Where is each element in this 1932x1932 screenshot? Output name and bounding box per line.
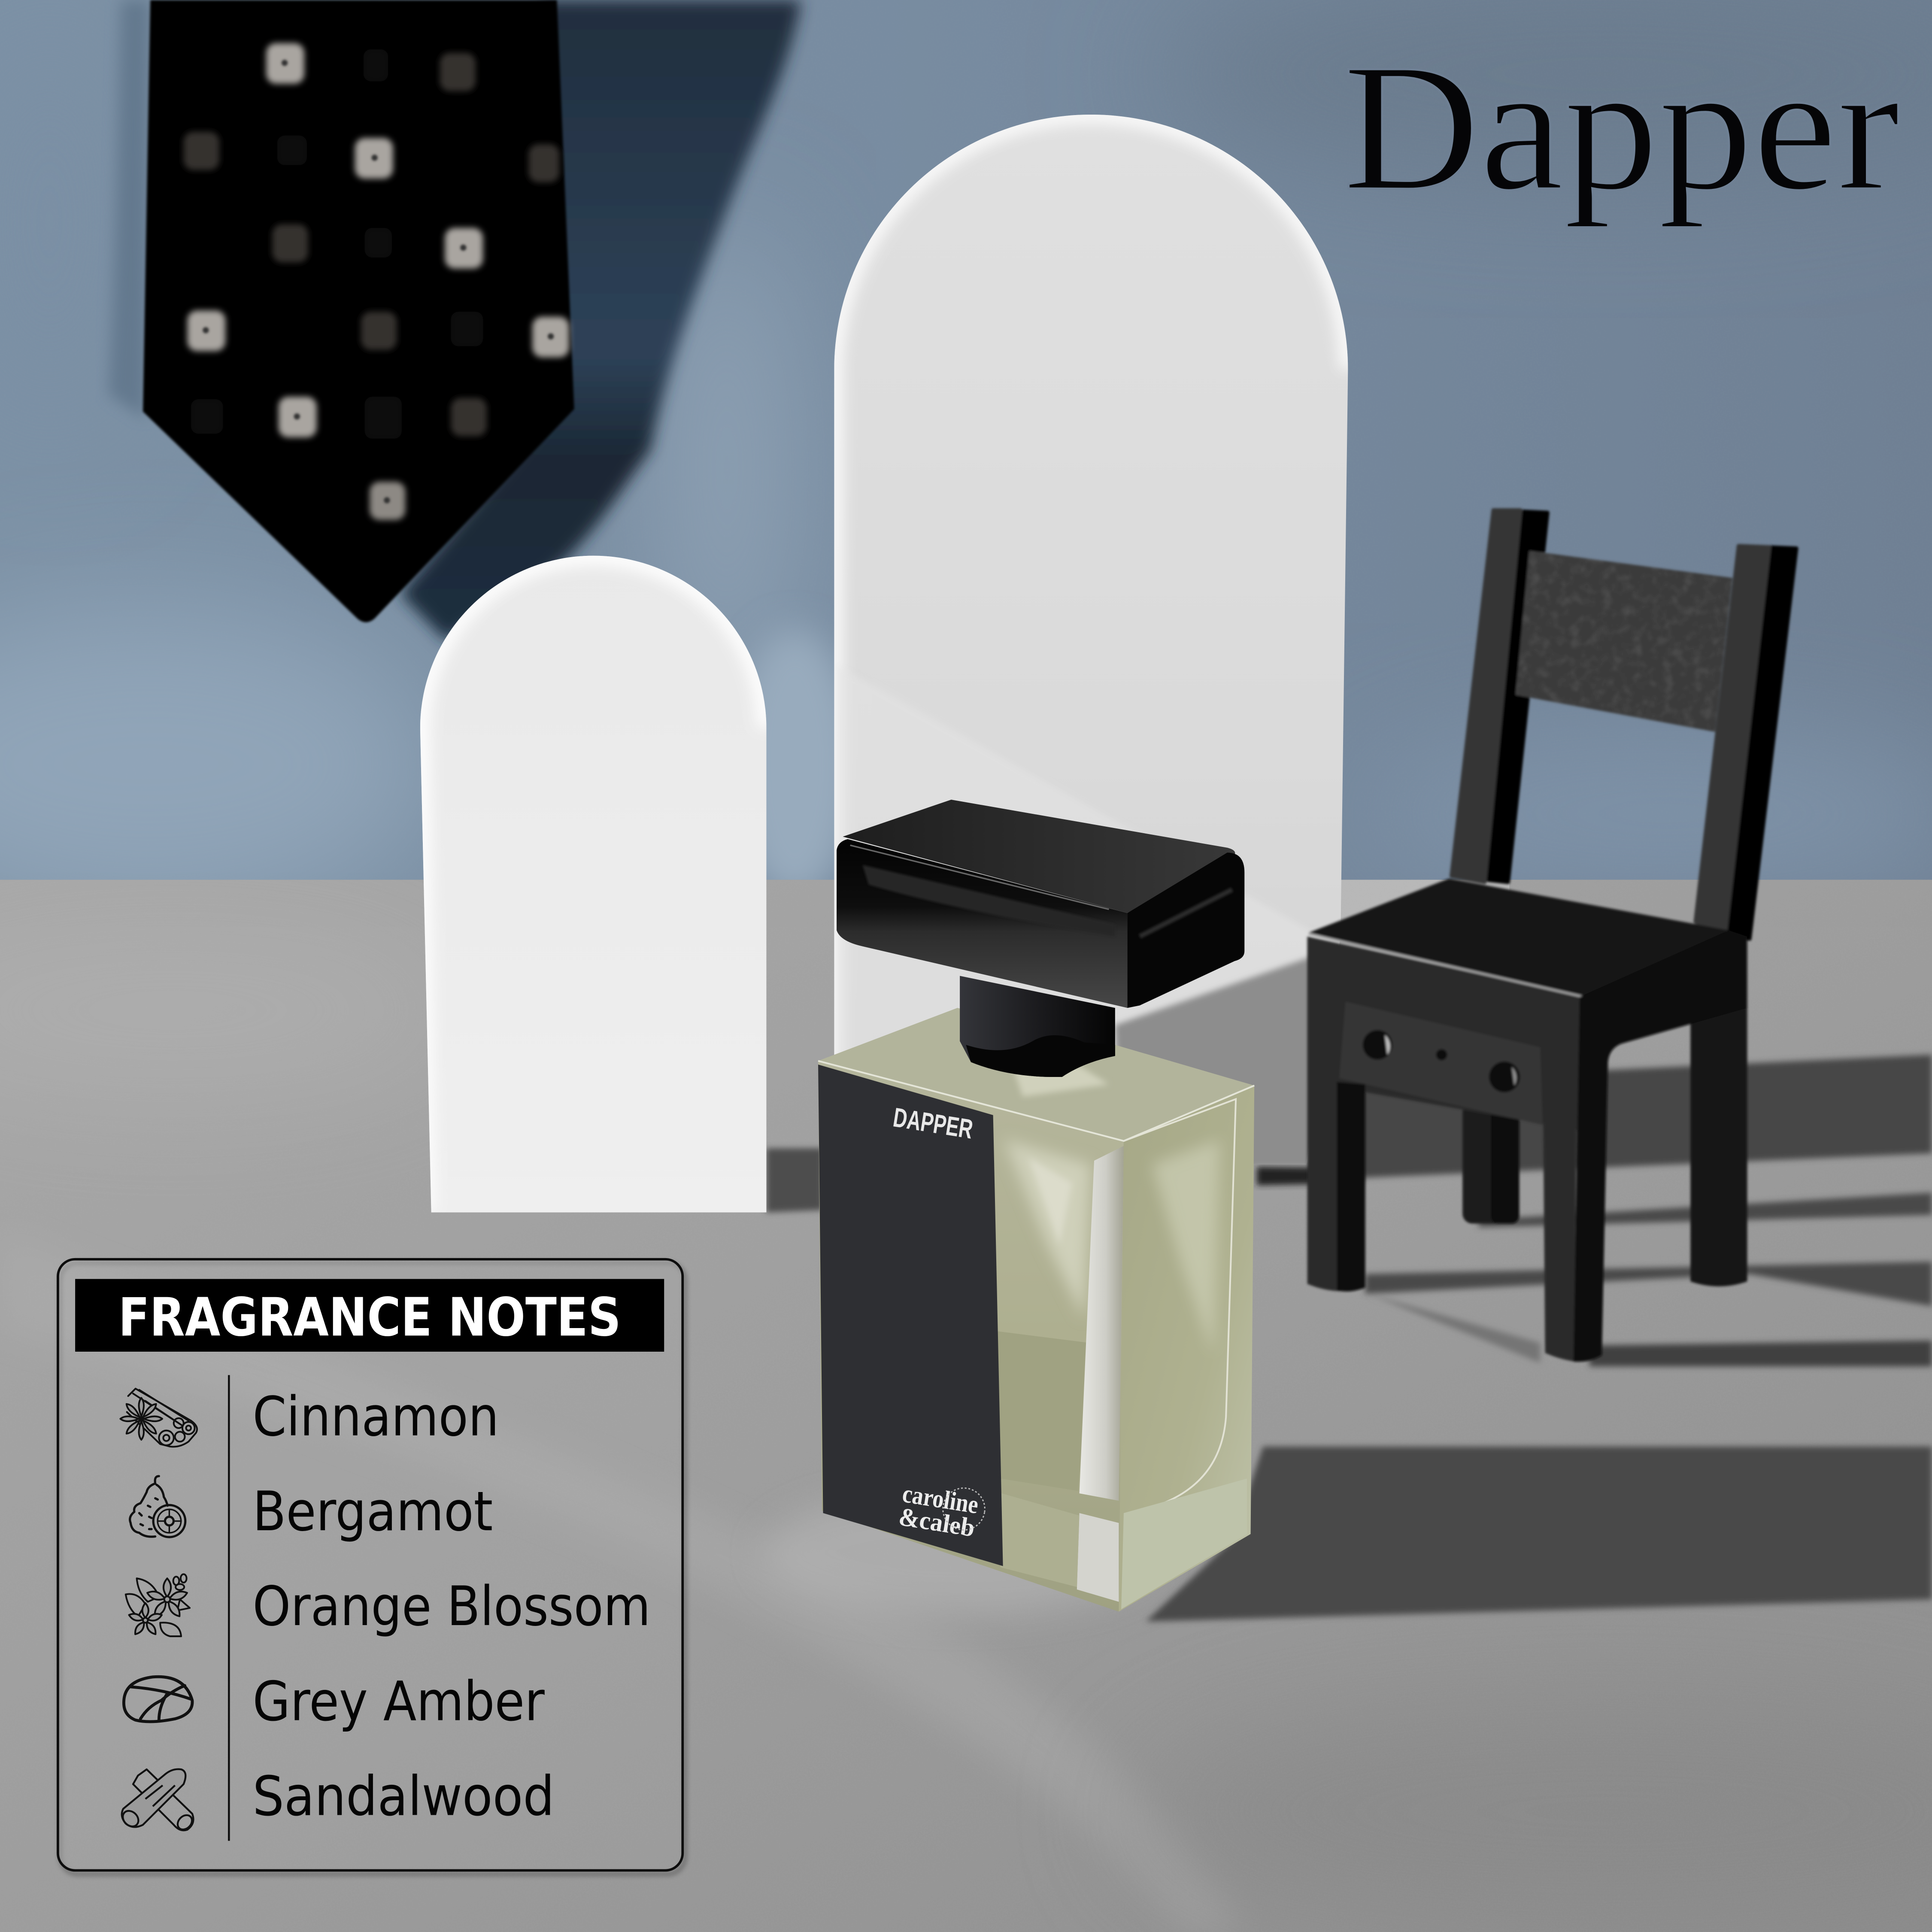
panel divider	[228, 1375, 230, 1841]
icon: cinnamon and star anise	[120, 1389, 197, 1447]
perfume bottle	[818, 800, 1254, 1612]
glass top	[818, 1008, 1254, 1141]
bottle shadow on floor	[1146, 1447, 1932, 1622]
wall background	[0, 0, 1932, 924]
cap front	[837, 839, 1128, 1008]
liquid and glass details	[818, 1053, 1254, 1609]
chair	[1307, 510, 1796, 1362]
cap right side	[1128, 852, 1244, 1008]
large arch	[825, 105, 1356, 1177]
chair seat edge highlight	[1309, 934, 1583, 997]
front legs	[1307, 937, 1577, 1362]
icon: bergamot	[130, 1476, 185, 1537]
bottle label	[818, 1065, 1003, 1566]
glass front face	[818, 1061, 1124, 1612]
note: Cinnamon: Cinnamon	[252, 1385, 499, 1448]
chair backrest	[1516, 551, 1732, 732]
chair apron	[1307, 937, 1583, 1131]
chair apron recess with holes	[1339, 1002, 1543, 1125]
title: Dapper	[1343, 26, 1900, 228]
chair side rail and dark corner	[1574, 930, 1747, 1362]
label brand name: DAPPER	[891, 1102, 975, 1145]
cap top	[843, 800, 1235, 913]
note labels	[252, 1385, 651, 1828]
panel header: FRAGRANCE NOTES	[118, 1287, 621, 1349]
label logo: &caleb	[897, 1502, 977, 1543]
icon: sandalwood	[120, 1769, 195, 1832]
small arch	[413, 548, 776, 1220]
panel: fragrance notes	[58, 1259, 682, 1870]
chair back posts	[1451, 510, 1796, 939]
label logo: caroline	[901, 1479, 980, 1520]
cap highlights	[850, 845, 1232, 937]
label logo	[897, 1478, 988, 1544]
neck	[960, 976, 1115, 1077]
note: Grey Amber: Grey Amber	[252, 1670, 545, 1733]
tie pattern squares	[184, 43, 569, 520]
floor shadow beside small arch	[766, 1148, 823, 1213]
glass right face	[1119, 1086, 1254, 1612]
chair seat	[1309, 879, 1729, 997]
icon: grey amber	[124, 1677, 192, 1722]
note: Bergamot: Bergamot	[252, 1480, 493, 1543]
necktie	[143, 0, 574, 622]
note: Sandalwood: Sandalwood	[252, 1765, 555, 1828]
floor	[0, 880, 1932, 1932]
chair shadows on floor	[1257, 1055, 1932, 1366]
icon: orange blossom	[126, 1574, 190, 1636]
back legs	[1462, 974, 1747, 1286]
note: Orange Blossom: Orange Blossom	[252, 1575, 651, 1638]
tie shadow on wall	[109, 0, 801, 641]
